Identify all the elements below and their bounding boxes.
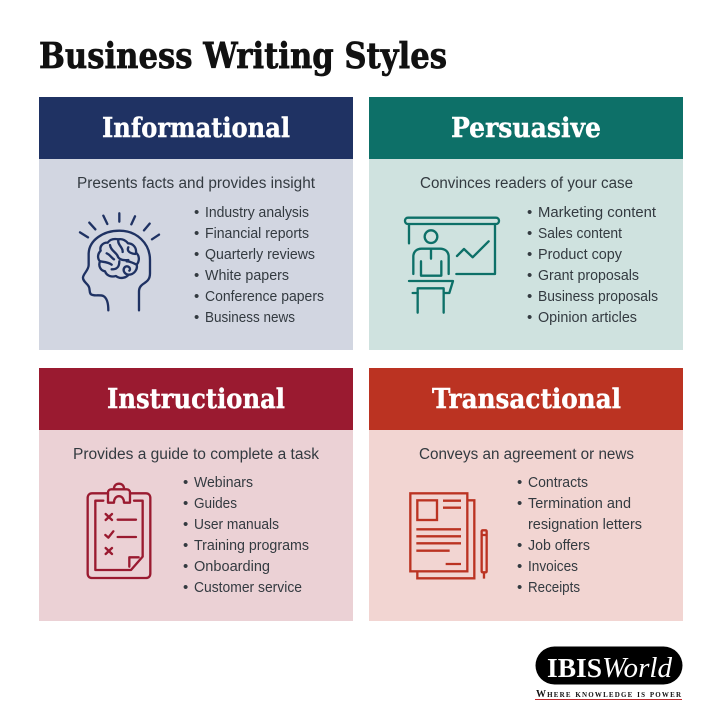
- description: persuasive: Convinces readers of your case: [420, 175, 633, 192]
- list: transactional: Job offers: [528, 537, 590, 554]
- icon: documents and pen: [410, 493, 487, 579]
- logo: IBISWorld: Where knowledge is power: [536, 689, 682, 700]
- list: instructional: Onboarding: [194, 558, 270, 575]
- panel: informational: [39, 97, 353, 350]
- list: persuasive: •: [527, 309, 532, 326]
- list: instructional: Training programs: [194, 537, 309, 554]
- heading: informational: [39, 97, 353, 159]
- list: instructional: Customer service: [194, 579, 302, 596]
- list: instructional: [183, 474, 309, 596]
- list: persuasive: •: [527, 225, 532, 242]
- list: informational: Industry analysis: [205, 204, 309, 221]
- list: transactional: Termination and: [528, 495, 631, 512]
- list: informational: •: [194, 246, 199, 263]
- list: informational: [194, 204, 324, 326]
- icon: presenter at board: [405, 218, 499, 313]
- list: informational: •: [194, 225, 199, 242]
- heading: instructional: [39, 368, 353, 430]
- list: instructional: Guides: [194, 495, 237, 512]
- list: persuasive: Product copy: [538, 246, 622, 263]
- list: persuasive: Marketing content: [538, 204, 657, 221]
- description: instructional: Provides a guide to complete a task: [73, 446, 319, 463]
- list: persuasive: Grant proposals: [538, 267, 639, 284]
- list: transactional: •: [517, 579, 522, 596]
- list: transactional: •: [517, 474, 522, 491]
- list: persuasive: Business proposals: [538, 288, 658, 305]
- list: informational: Business news: [205, 309, 295, 326]
- panel: transactional: [369, 368, 683, 621]
- list: informational: •: [194, 288, 199, 305]
- list: informational: White papers: [205, 267, 289, 284]
- list: transactional: •: [517, 537, 522, 554]
- heading: persuasive: Persuasive: [451, 112, 601, 144]
- list: transactional: •: [517, 495, 522, 512]
- panel: instructional: [39, 368, 353, 621]
- list: instructional: User manuals: [194, 516, 279, 533]
- list: informational: •: [194, 204, 199, 221]
- list: instructional: •: [183, 516, 188, 533]
- logo: IBISWorld: IBIS: [547, 653, 602, 683]
- icon: head with brain: [80, 213, 159, 310]
- list: transactional: Invoices: [528, 558, 578, 575]
- list: persuasive: Sales content: [538, 225, 623, 242]
- description: transactional: Conveys an agreement or news: [419, 446, 634, 463]
- description: informational: Presents facts and provides insight: [77, 175, 316, 192]
- list: instructional: •: [183, 579, 188, 596]
- list: persuasive: •: [527, 204, 532, 221]
- icon: clipboard checklist: [88, 484, 150, 578]
- list: transactional: •: [517, 558, 522, 575]
- list: instructional: Webinars: [194, 474, 253, 491]
- list: instructional: •: [183, 474, 188, 491]
- heading: instructional: Instructional: [107, 383, 285, 415]
- list: transactional: Receipts: [528, 579, 580, 596]
- heading: persuasive: [369, 97, 683, 159]
- list: informational: Conference papers: [205, 288, 324, 305]
- list: transactional: Contracts: [528, 474, 588, 491]
- logo: IBISWorld: [535, 646, 682, 700]
- list: instructional: •: [183, 558, 188, 575]
- title: Business Writing Styles: [39, 36, 447, 77]
- heading: transactional: [369, 368, 683, 430]
- list: informational: Financial reports: [205, 225, 309, 242]
- heading: transactional: Transactional: [432, 383, 621, 415]
- list: persuasive: •: [527, 246, 532, 263]
- list: persuasive: •: [527, 288, 532, 305]
- list: transactional: resignation letters: [528, 516, 642, 533]
- list: persuasive: [527, 204, 658, 326]
- logo: IBISWorld: World: [602, 653, 673, 684]
- list: informational: •: [194, 309, 199, 326]
- heading: informational: Informational: [102, 112, 290, 144]
- list: instructional: •: [183, 495, 188, 512]
- panel: persuasive: [369, 97, 683, 350]
- list: informational: Quarterly reviews: [205, 246, 315, 263]
- list: informational: •: [194, 267, 199, 284]
- list: transactional: [517, 474, 642, 596]
- list: instructional: •: [183, 537, 188, 554]
- list: persuasive: Opinion articles: [538, 309, 637, 326]
- list: persuasive: •: [527, 267, 532, 284]
